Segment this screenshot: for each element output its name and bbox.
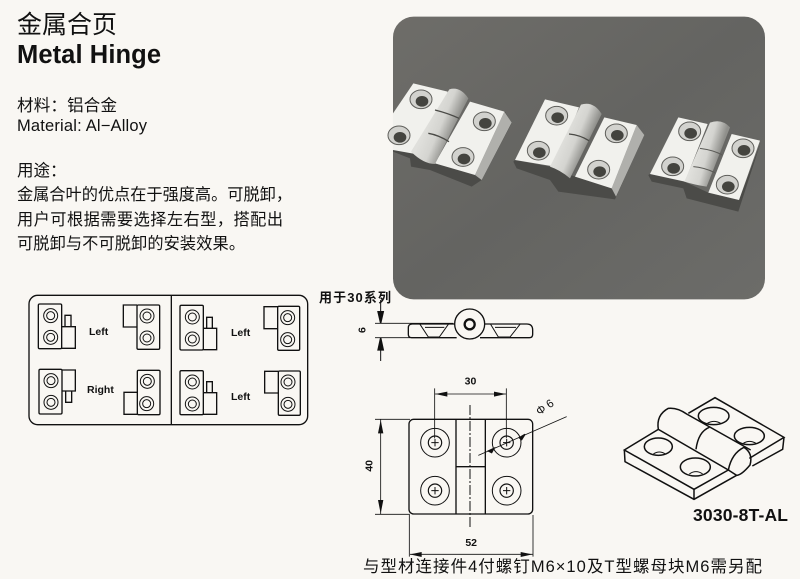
photo hinge right <box>648 117 761 212</box>
panel: hinge orientation diagrams <box>29 295 308 425</box>
label: Left: Left <box>89 326 109 338</box>
material text block: Material: Al−Alloy <box>17 117 148 135</box>
title <box>17 11 161 69</box>
right diagram, bottom row <box>180 371 300 415</box>
title: Metal Hinge <box>17 41 161 69</box>
photo hinge left <box>388 83 512 187</box>
front view drawing <box>364 377 567 557</box>
dimension: diameter 6: Φ 6 <box>534 398 556 418</box>
3D line drawing of hinge <box>624 398 784 499</box>
product photo <box>388 17 765 299</box>
material text block <box>17 96 148 135</box>
left diagram, top row <box>38 304 160 349</box>
side view drawing <box>358 300 533 361</box>
dimension: 30: 30 <box>465 377 476 388</box>
footer note: 与型材连接件4付螺钉M6×10及T型螺母块M6需另配 <box>363 557 762 576</box>
usage text block: 金属合叶的优点在于强度高。可脱卸， <box>17 186 292 204</box>
title: 金属合页 <box>17 11 117 39</box>
left diagram, bottom row <box>39 369 160 415</box>
label: Left: Left <box>231 391 251 403</box>
usage text block <box>17 161 292 253</box>
usage text block: 用户可根据需要选择左右型，搭配出 <box>17 211 283 229</box>
usage text block: 可脱卸与不可脱卸的安装效果。 <box>17 235 245 253</box>
series label: 用于30系列 <box>319 290 391 305</box>
part number: 3030-8T-AL <box>693 505 788 525</box>
label: Right: Right <box>87 384 114 396</box>
material text block: 材料：铝合金 <box>17 96 118 115</box>
dimension: 40: 40 <box>364 460 375 472</box>
dimension: 52: 52 <box>465 538 477 549</box>
usage text block: 用途： <box>17 161 66 180</box>
photo hinge middle <box>513 99 644 199</box>
right diagram, top row <box>180 305 300 350</box>
dimension: 6: 6 <box>358 327 369 333</box>
label: Left: Left <box>231 327 251 339</box>
